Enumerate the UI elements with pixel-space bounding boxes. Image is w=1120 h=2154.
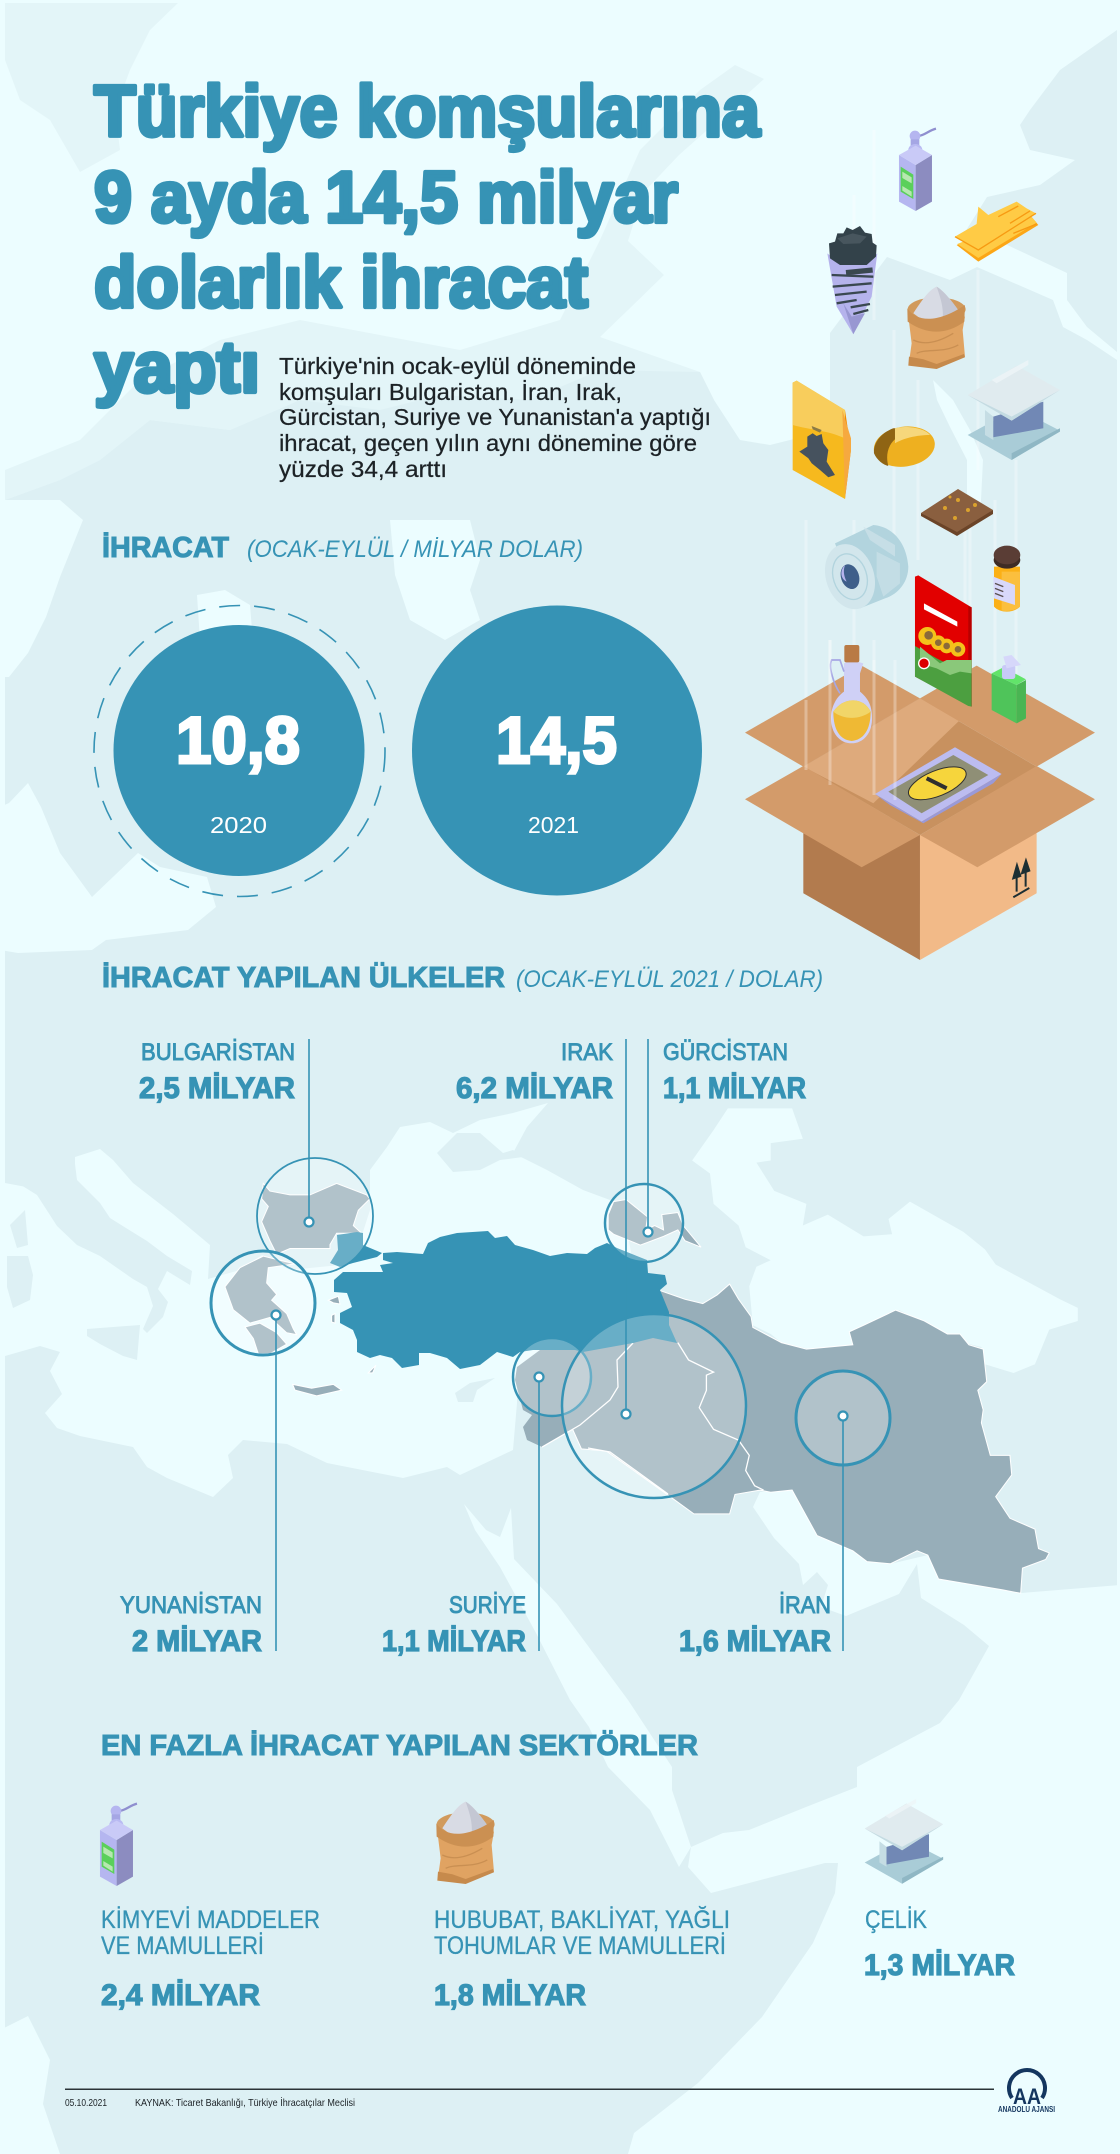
circle: 2021: 14,5 <box>496 703 617 777</box>
illustration: export products <box>745 129 1095 960</box>
intro paragraph: ihracat, geçen yılın aynı dönemine göre <box>279 430 697 456</box>
label: Bulgaria: BULGARİSTAN <box>141 1039 295 1066</box>
sector: steel: ÇELİK <box>865 1905 927 1934</box>
label: Greece: YUNANİSTAN <box>120 1592 262 1619</box>
sector: steel <box>864 1799 1015 1982</box>
lens circles <box>211 1158 890 1498</box>
icon: oil bottle <box>831 645 872 743</box>
circle: 2020: 2020 <box>210 812 267 838</box>
label: Iraq: IRAK <box>561 1039 613 1066</box>
sector: grains: 1,8 MİLYAR <box>434 1979 586 2012</box>
icon: jar <box>993 546 1020 612</box>
label: Iran: 1,6 MİLYAR <box>679 1625 831 1658</box>
intro paragraph <box>279 353 711 482</box>
Syria <box>515 1340 720 1500</box>
intro paragraph: Gürcistan, Suriye ve Yunanistan'a yaptığı <box>279 404 711 430</box>
title <box>94 72 761 408</box>
logo: Anadolu Ajansi <box>998 2070 1055 2114</box>
footer: 05.10.2021 <box>65 2097 107 2109</box>
label: Georgia <box>663 1039 806 1105</box>
icon: sack of flour <box>907 287 966 369</box>
title: dolarlık ihracat <box>94 243 588 323</box>
label: Georgia: GÜRCİSTAN <box>663 1039 788 1066</box>
circle: 2020 <box>94 606 385 896</box>
section heading: countries <box>102 961 823 994</box>
Turkey <box>334 1231 677 1369</box>
intro paragraph: yüzde 34,4 arttı <box>279 456 447 482</box>
label: Iraq: 6,2 MİLYAR <box>456 1072 613 1105</box>
icon: steel beam <box>968 360 1060 460</box>
title: yaptı <box>94 328 260 408</box>
Iran and Iraq <box>542 1284 1049 1593</box>
Thrace <box>330 1232 382 1267</box>
footer <box>65 2088 994 2109</box>
label: Georgia: 1,1 MİLYAR <box>663 1072 806 1105</box>
foreground streaks <box>806 640 895 800</box>
Caspian and Aral <box>692 1108 1078 1373</box>
Georgia <box>608 1200 701 1247</box>
intro paragraph: komşuları Bulgaristan, İran, Irak, <box>279 379 622 405</box>
circle: 2021: 2021 <box>528 812 579 838</box>
sector: chemicals: 2,4 MİLYAR <box>101 1979 260 2012</box>
intro paragraph: Türkiye'nin ocak-eylül döneminde <box>279 353 636 379</box>
label: Bulgaria: 2,5 MİLYAR <box>139 1072 295 1105</box>
sector: grains <box>434 1802 730 2012</box>
Bulgaria <box>262 1183 370 1254</box>
circle: 2021 <box>412 606 702 896</box>
icon: dispenser <box>100 1804 137 1886</box>
icon: soap bottle <box>992 655 1026 723</box>
map of Turkey and neighbours <box>211 1039 1049 1651</box>
Iraq Iran border <box>678 1343 764 1490</box>
icon: this way up arrows <box>1013 861 1029 897</box>
sector: grains: TOHUMLAR VE MAMULLERİ <box>434 1931 726 1960</box>
label: Iran: İRAN <box>779 1592 831 1619</box>
Greece <box>225 1256 376 1396</box>
icon: bread <box>871 423 937 471</box>
label: Syria: SURİYE <box>449 1592 526 1619</box>
circle: 2020: 10,8 <box>176 703 300 777</box>
location dots <box>272 1218 848 1420</box>
label: Iran <box>679 1592 831 1658</box>
label: Syria <box>382 1592 526 1658</box>
label: Greece: 2 MİLYAR <box>132 1625 262 1658</box>
section heading: export <box>102 532 583 564</box>
section heading: sectors: EN FAZLA İHRACAT YAPILAN SEKTÖRLER <box>101 1729 698 1762</box>
section heading: export: İHRACAT <box>102 532 229 564</box>
label: Greece <box>120 1592 262 1658</box>
sector: chemicals <box>100 1804 320 2012</box>
label: Bulgaria <box>139 1039 295 1105</box>
logo: Anadolu Ajansi: AA <box>1013 2084 1041 2109</box>
section heading: export: (OCAK-EYLÜL / MİLYAR DOLAR) <box>247 536 583 563</box>
footer: KAYNAK: Ticaret Bakanlığı, Türkiye İhracatçılar Meclisi <box>135 2096 355 2109</box>
box <box>745 666 1095 960</box>
leader lines <box>276 1039 843 1651</box>
section heading: countries: İHRACAT YAPILAN ÜLKELER <box>102 961 505 994</box>
section heading: countries: (OCAK-EYLÜL 2021 / DOLAR) <box>516 966 823 993</box>
icon: sack <box>436 1802 495 1884</box>
icon: paper cone with seeds <box>827 226 877 334</box>
icon: tray of seeds <box>875 747 1002 823</box>
logo: Anadolu Ajansi: ANADOLU AJANSI <box>998 2105 1055 2114</box>
icon: cracker <box>921 489 993 536</box>
sector: chemicals: KİMYEVİ MADDELER <box>101 1905 320 1934</box>
icon: dispenser <box>899 129 936 211</box>
label: Syria: 1,1 MİLYAR <box>382 1625 526 1658</box>
sector: steel: 1,3 MİLYAR <box>864 1949 1015 1982</box>
sector: chemicals: VE MAMULLERİ <box>101 1931 264 1960</box>
icon: red seed bag <box>915 575 972 707</box>
borders <box>542 1343 668 1494</box>
title: 9 ayda 14,5 milyar <box>94 158 678 238</box>
icon: yellow seed bag <box>793 381 851 499</box>
icon: roll <box>817 525 908 616</box>
sector: grains: HUBUBAT, BAKLİYAT, YAĞLI <box>434 1905 730 1934</box>
title: Türkiye komşularına <box>94 72 761 152</box>
label: Iraq <box>456 1039 613 1105</box>
icon: steel beam <box>865 1799 943 1884</box>
icon: gloves <box>955 202 1038 262</box>
light streaks <box>806 130 1016 820</box>
